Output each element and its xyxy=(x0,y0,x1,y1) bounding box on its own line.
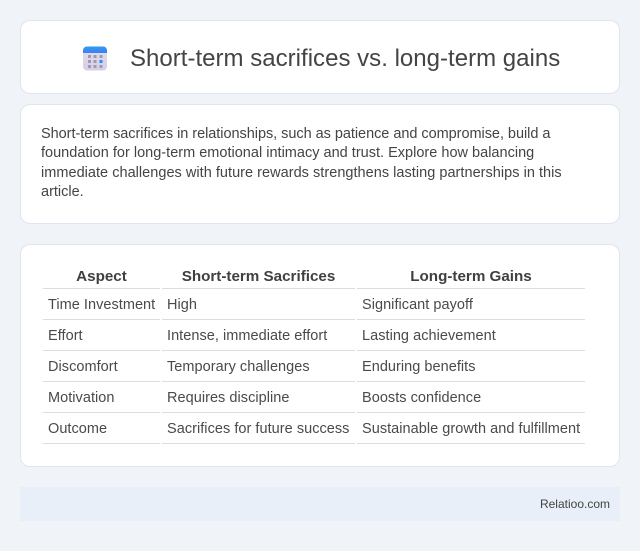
table header: Short-term Sacrifices xyxy=(182,268,335,285)
table header xyxy=(76,268,532,285)
intro text: foundation for long-term emotional intimacy and trust. Explore how balancing xyxy=(41,145,534,161)
table rows: Outcome xyxy=(48,421,107,437)
table rows xyxy=(43,288,585,444)
table rows: Sustainable growth and fulfillment xyxy=(362,421,580,437)
panel: introduction xyxy=(20,104,620,224)
intro text: Short-term sacrifices in relationships, such as patience and compromise, build a xyxy=(41,126,550,142)
table rows: Temporary challenges xyxy=(167,359,310,375)
icon: calendar xyxy=(83,46,107,70)
panel: title card xyxy=(20,20,620,94)
intro text: article. xyxy=(41,184,84,200)
table rows: Effort xyxy=(48,328,83,344)
table rows: Sacrifices for future success xyxy=(167,421,349,437)
table rows: Time Investment xyxy=(48,297,155,313)
table rows: Significant payoff xyxy=(362,297,473,313)
table rows: Enduring benefits xyxy=(362,359,476,375)
panel: comparison table xyxy=(20,244,620,467)
table rows: Intense, immediate effort xyxy=(167,328,327,344)
footer bar xyxy=(20,487,620,521)
footer brand text: Relatioo.com xyxy=(540,497,610,511)
table rows: Boosts confidence xyxy=(362,390,481,406)
title: Short-term sacrifices vs. long-term gains xyxy=(130,45,560,72)
table rows: Discomfort xyxy=(48,359,118,375)
table rows: Motivation xyxy=(48,390,114,406)
intro text: immediate challenges with future rewards strengthens lasting partnerships in this xyxy=(41,165,562,181)
table rows: High xyxy=(167,297,197,313)
table rows: Lasting achievement xyxy=(362,328,496,344)
table header: Aspect xyxy=(76,268,127,285)
intro text xyxy=(41,126,562,200)
table header: Long-term Gains xyxy=(410,268,532,285)
table rows: Requires discipline xyxy=(167,390,289,406)
